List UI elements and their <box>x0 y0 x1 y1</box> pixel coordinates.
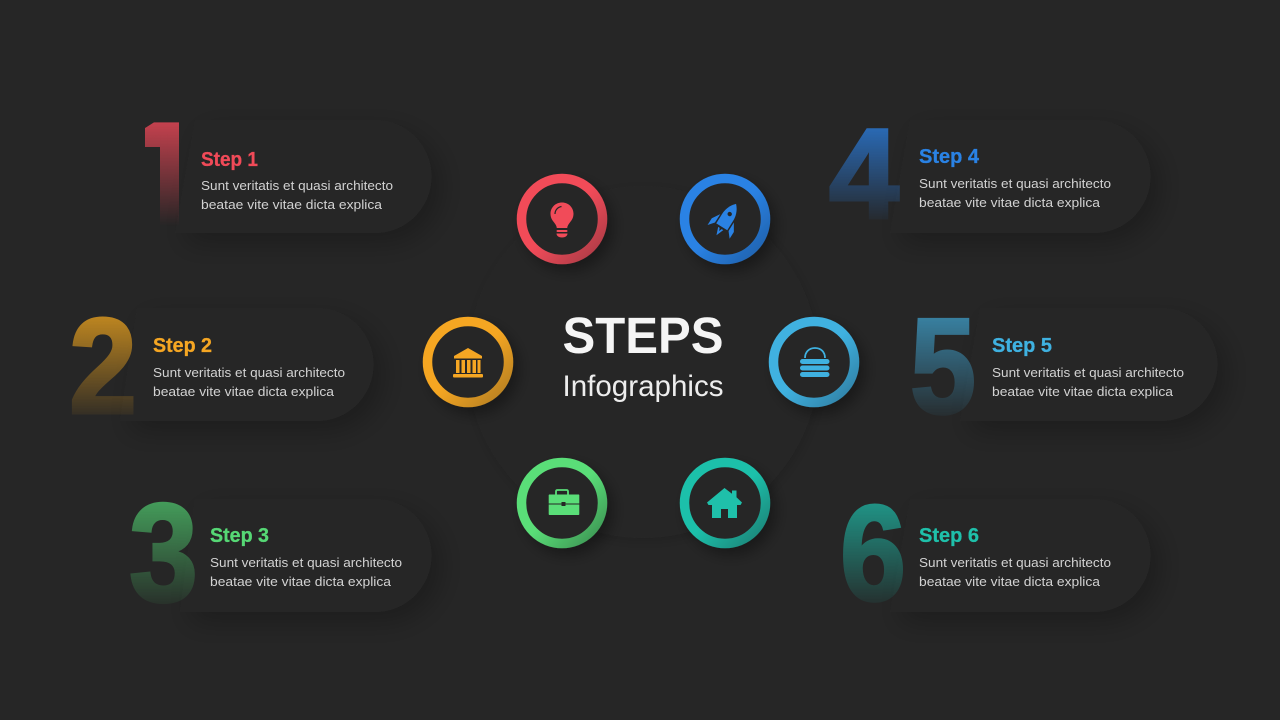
icon ring: rocket <box>684 178 766 260</box>
text block 5: Sunt veritatis et quasi architecto <box>992 366 1184 380</box>
text block 1: beatae vite vitae dicta explica <box>201 198 382 212</box>
icon ring: briefcase <box>522 462 602 544</box>
card 1 <box>175 120 432 233</box>
text block 5: beatae vite vitae dicta explica <box>992 385 1173 399</box>
panel: step 6 <box>843 504 1150 612</box>
panel: step 3 <box>130 502 432 612</box>
card 2 <box>120 308 374 421</box>
text block 2 <box>153 366 345 399</box>
text block 4: beatae vite vitae dicta explica <box>919 196 1100 210</box>
title <box>562 307 724 403</box>
card 5 <box>960 308 1218 421</box>
heading: Step 1: Step 1 <box>201 149 258 171</box>
text block 1: Sunt veritatis et quasi architecto <box>201 179 393 193</box>
panel: step 2 <box>72 316 374 421</box>
panel: step 4 <box>830 128 1150 233</box>
text block 6: beatae vite vitae dicta explica <box>919 575 1100 589</box>
card 6 <box>890 499 1150 612</box>
heading: Step 6: Step 6 <box>919 525 979 547</box>
icon ring: bank <box>428 322 508 402</box>
icon: house <box>707 488 742 518</box>
panel: step 1 <box>145 122 432 233</box>
central disc <box>467 186 819 538</box>
number 4: 4 <box>829 103 899 246</box>
text block 6: Sunt veritatis et quasi architecto <box>919 556 1111 570</box>
icon: stacked lock <box>800 348 830 377</box>
text block 2: beatae vite vitae dicta explica <box>153 385 334 399</box>
heading: Step 5: Step 5 <box>992 335 1052 357</box>
heading: Step 3: Step 3 <box>210 525 269 547</box>
card 3 <box>180 499 432 612</box>
number 2: 2 <box>69 290 137 442</box>
icon ring: light bulb <box>522 178 602 260</box>
text block 5 <box>992 366 1184 399</box>
text block 4 <box>919 177 1111 210</box>
number 3: 3 <box>129 474 198 631</box>
text block 3 <box>210 556 402 589</box>
text block 2: Sunt veritatis et quasi architecto <box>153 366 345 380</box>
text block 6 <box>919 556 1111 589</box>
text block 4: Sunt veritatis et quasi architecto <box>919 177 1111 191</box>
subheading: Infographics: Infographics <box>562 370 724 403</box>
panel: step 5 <box>912 318 1218 421</box>
heading: Step 4: Step 4 <box>919 146 980 168</box>
text block 1 <box>201 179 393 212</box>
heading: Step 2: Step 2 <box>153 335 212 357</box>
icon: light bulb <box>550 202 574 238</box>
icon ring: stacked lock <box>774 322 854 402</box>
icon: bank <box>453 348 483 378</box>
number 6: 6 <box>840 477 906 629</box>
text block 3: Sunt veritatis et quasi architecto <box>210 556 402 570</box>
card 4 <box>890 120 1150 233</box>
text block 3: beatae vite vitae dicta explica <box>210 575 391 589</box>
icon ring: house <box>684 462 766 544</box>
number 1: 1 <box>122 99 200 251</box>
icon: rocket <box>705 197 747 242</box>
heading: STEPS: STEPS <box>562 307 724 364</box>
icon: briefcase <box>549 490 579 515</box>
number 5: 5 <box>910 290 976 442</box>
